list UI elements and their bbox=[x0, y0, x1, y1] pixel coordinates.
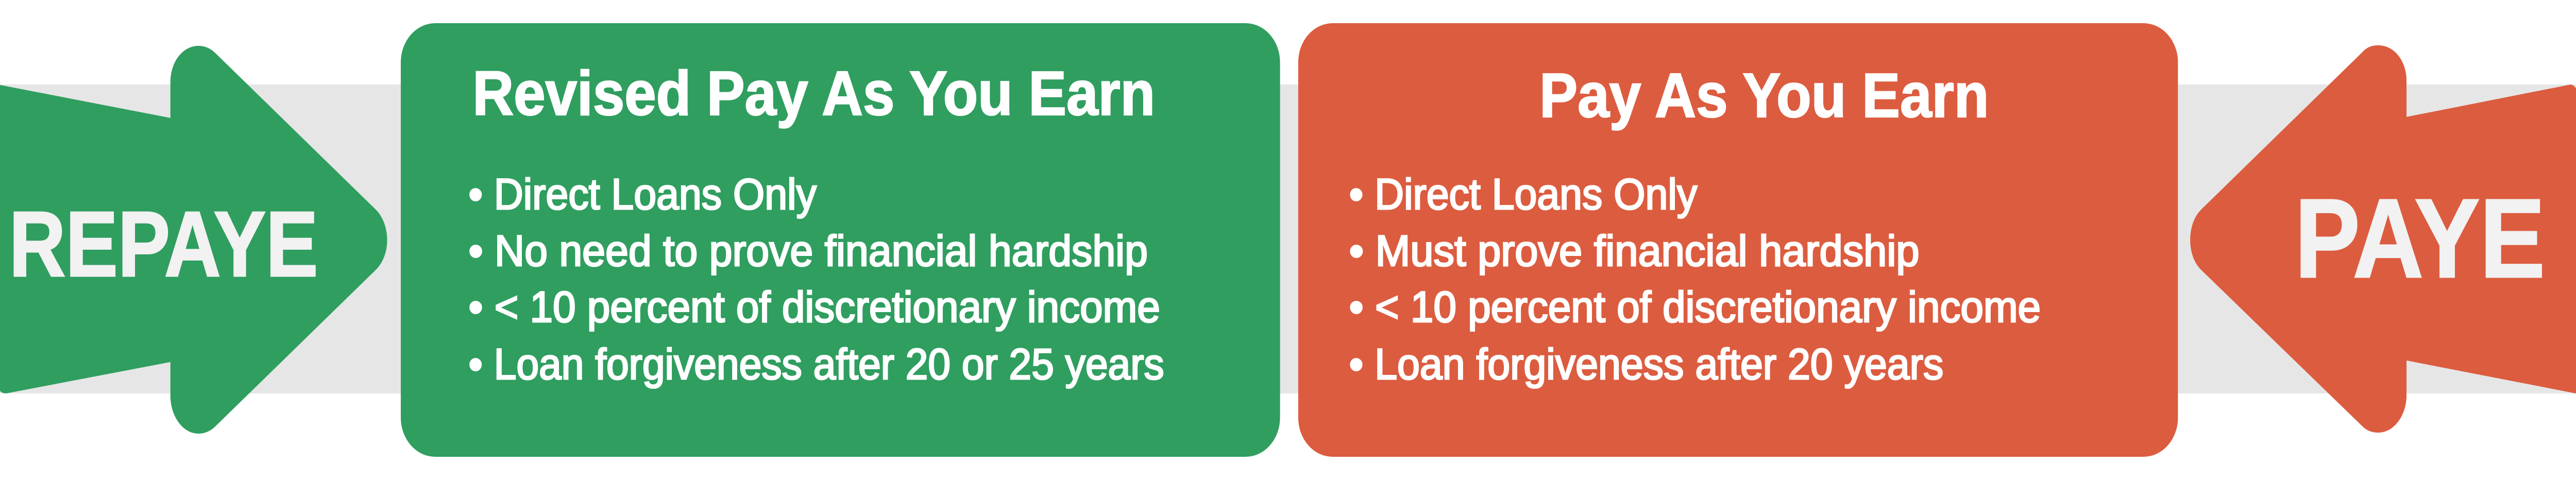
list: PAYE features: • Loan forgiveness after 20 years bbox=[1349, 340, 1943, 388]
arrow label: PAYE: PAYE bbox=[2295, 176, 2545, 301]
arrow: PAYE bbox=[2190, 45, 2576, 433]
list: REPAYE features bbox=[468, 170, 1164, 388]
list: REPAYE features: • No need to prove financial hardship bbox=[468, 227, 1148, 275]
heading: Revised Pay As You Earn: Revised Pay As You Earn bbox=[472, 59, 1155, 129]
list: REPAYE features: • Loan forgiveness after 20 or 25 years bbox=[468, 340, 1164, 388]
list: REPAYE features: • < 10 percent of discretionary income bbox=[468, 283, 1160, 331]
arrow label: REPAYE: REPAYE bbox=[9, 192, 318, 296]
list: REPAYE features: • Direct Loans Only bbox=[468, 170, 817, 218]
heading: Pay As You Earn: Pay As You Earn bbox=[1539, 61, 1989, 131]
arrow: REPAYE bbox=[0, 46, 387, 434]
panel: Revised Pay As You Earn bbox=[401, 23, 1280, 457]
panel: Pay As You Earn bbox=[1298, 23, 2178, 457]
list: PAYE features: • < 10 percent of discretionary income bbox=[1349, 283, 2041, 331]
list: PAYE features: • Must prove financial hardship bbox=[1349, 227, 1920, 275]
list: PAYE features: • Direct Loans Only bbox=[1349, 170, 1698, 218]
background band bbox=[0, 84, 2576, 393]
list: PAYE features bbox=[1349, 170, 2041, 388]
